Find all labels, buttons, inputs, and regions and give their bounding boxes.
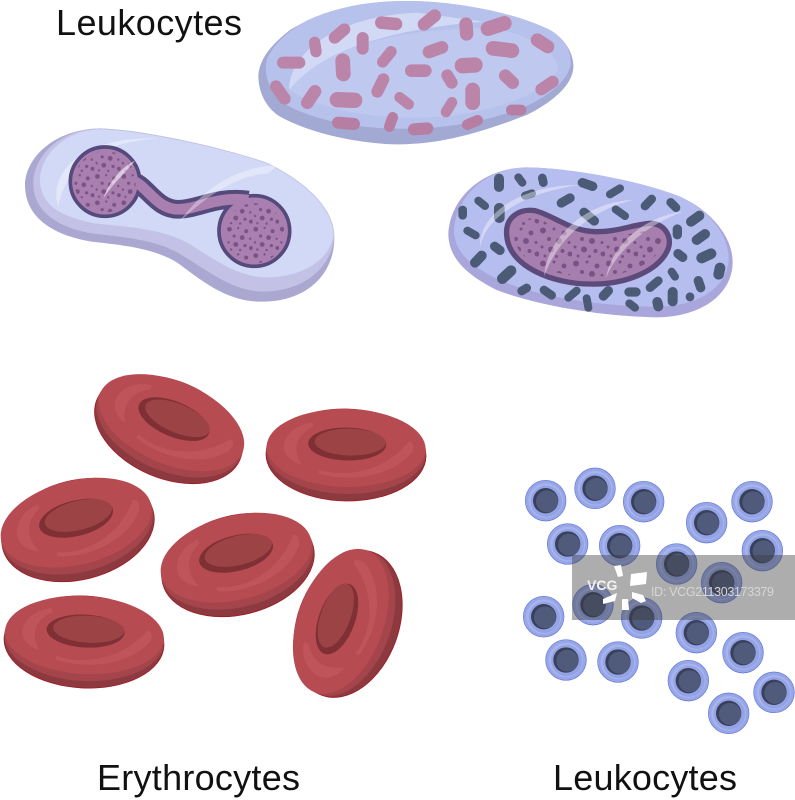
watermark band: VCG (587, 577, 617, 593)
erythrocyte 5 (2, 592, 166, 692)
erythrocyte 4 (151, 498, 325, 632)
watermark band: ID: VCG211303173379 (651, 585, 774, 599)
erythrocyte group (0, 354, 427, 713)
title: top Leukocytes: Leukocytes (56, 2, 242, 43)
cell: granulocyte with pink granules (258, 1, 573, 144)
erythrocyte 3 (0, 463, 165, 597)
erythrocyte 6 (274, 535, 422, 713)
leukocyte cluster (523, 468, 794, 734)
erythrocyte 1 (78, 354, 259, 505)
cell: eosinophil with dark granules and curved nucleus (448, 167, 733, 317)
label: Erythrocytes: Erythrocytes (97, 757, 300, 798)
watermark band (572, 555, 795, 620)
erythrocyte 2 (265, 408, 427, 502)
label: bottom Leukocytes: Leukocytes (553, 757, 737, 798)
cell: segmented neutrophil with two-lobed nucleus (25, 128, 334, 302)
